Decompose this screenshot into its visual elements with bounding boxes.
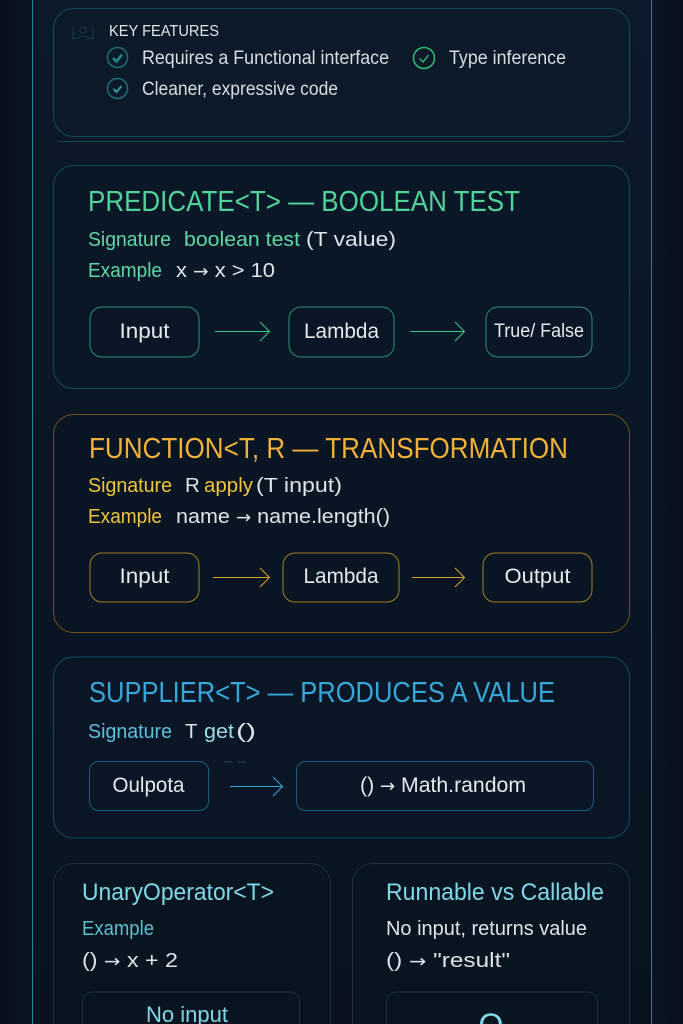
heading: runnable vs callable: Runnable vs Callable — [386, 879, 604, 906]
flow: true false: True/ False — [494, 321, 584, 342]
panel: supplier — [54, 657, 630, 838]
arrow — [412, 568, 464, 587]
signature: boolean test — [184, 228, 300, 251]
code: result: () → "result" — [386, 949, 510, 972]
flow: lambda box — [296, 762, 594, 810]
icon: user badge — [73, 27, 93, 39]
arrow — [410, 322, 464, 341]
signature: (T value) — [306, 228, 396, 251]
flow: output box: Oulpota — [112, 774, 185, 797]
heading: unary operator: UnaryOperator<T> — [82, 879, 274, 906]
example — [88, 259, 275, 282]
example: name → name.length() — [176, 505, 390, 528]
code: example: () → x + 2 — [82, 949, 178, 972]
signature: Signature — [88, 474, 172, 497]
flow: input — [90, 553, 199, 602]
heading: key features: KEY FEATURES — [109, 23, 219, 40]
flow: lambda box: () → Math.random — [360, 774, 526, 797]
flow: input — [90, 307, 199, 357]
arrow — [215, 322, 270, 341]
feature: cleaner code: Cleaner, expressive code — [142, 79, 338, 100]
signature: () — [236, 720, 256, 743]
flow: input: Input — [120, 565, 170, 588]
signature: Signature — [88, 720, 172, 743]
flow: lambda — [289, 307, 394, 357]
signature: Signature — [88, 228, 171, 251]
flow: output: Output — [504, 565, 571, 588]
box: no input — [82, 992, 300, 1024]
heading: predicate: PREDICATE<T> — BOOLEAN TEST — [88, 186, 520, 218]
signature: R — [185, 474, 200, 497]
text: no input: No input, returns value — [386, 917, 587, 940]
box: empty parens — [386, 992, 598, 1024]
example: x → x > 10 — [176, 259, 275, 282]
panel: unary operator — [54, 864, 330, 1024]
label: example: Example — [82, 917, 154, 940]
flow: true false — [486, 307, 592, 357]
arrow — [213, 568, 270, 587]
signature: get — [204, 720, 234, 743]
feature: type inference: Type inference — [449, 48, 566, 69]
signature — [88, 228, 396, 251]
signature: apply — [204, 474, 254, 497]
heading: function: FUNCTION<T, R — TRANSFORMATION — [89, 433, 568, 465]
signature — [88, 720, 256, 743]
panel: predicate — [54, 166, 630, 388]
heading: supplier: SUPPLIER<T> — PRODUCES A VALUE — [89, 677, 555, 709]
flow: lambda: Lambda — [304, 320, 379, 343]
panel: function — [54, 414, 630, 632]
example — [88, 505, 390, 528]
panel: runnable vs callable — [352, 864, 630, 1024]
flow: output box — [90, 762, 208, 810]
signature: T — [185, 720, 198, 743]
flow: output — [483, 553, 592, 602]
feature: functional interface: Requires a Functional interface — [142, 48, 389, 69]
signature — [88, 474, 342, 497]
example: Example — [88, 505, 162, 528]
flow: lambda: Lambda — [304, 565, 379, 588]
signature: (T input) — [256, 474, 342, 497]
arrow — [230, 777, 282, 796]
panel: key features — [54, 8, 630, 136]
flow: input: Input — [120, 320, 170, 343]
example: Example — [88, 259, 162, 282]
flow: lambda — [283, 553, 399, 602]
